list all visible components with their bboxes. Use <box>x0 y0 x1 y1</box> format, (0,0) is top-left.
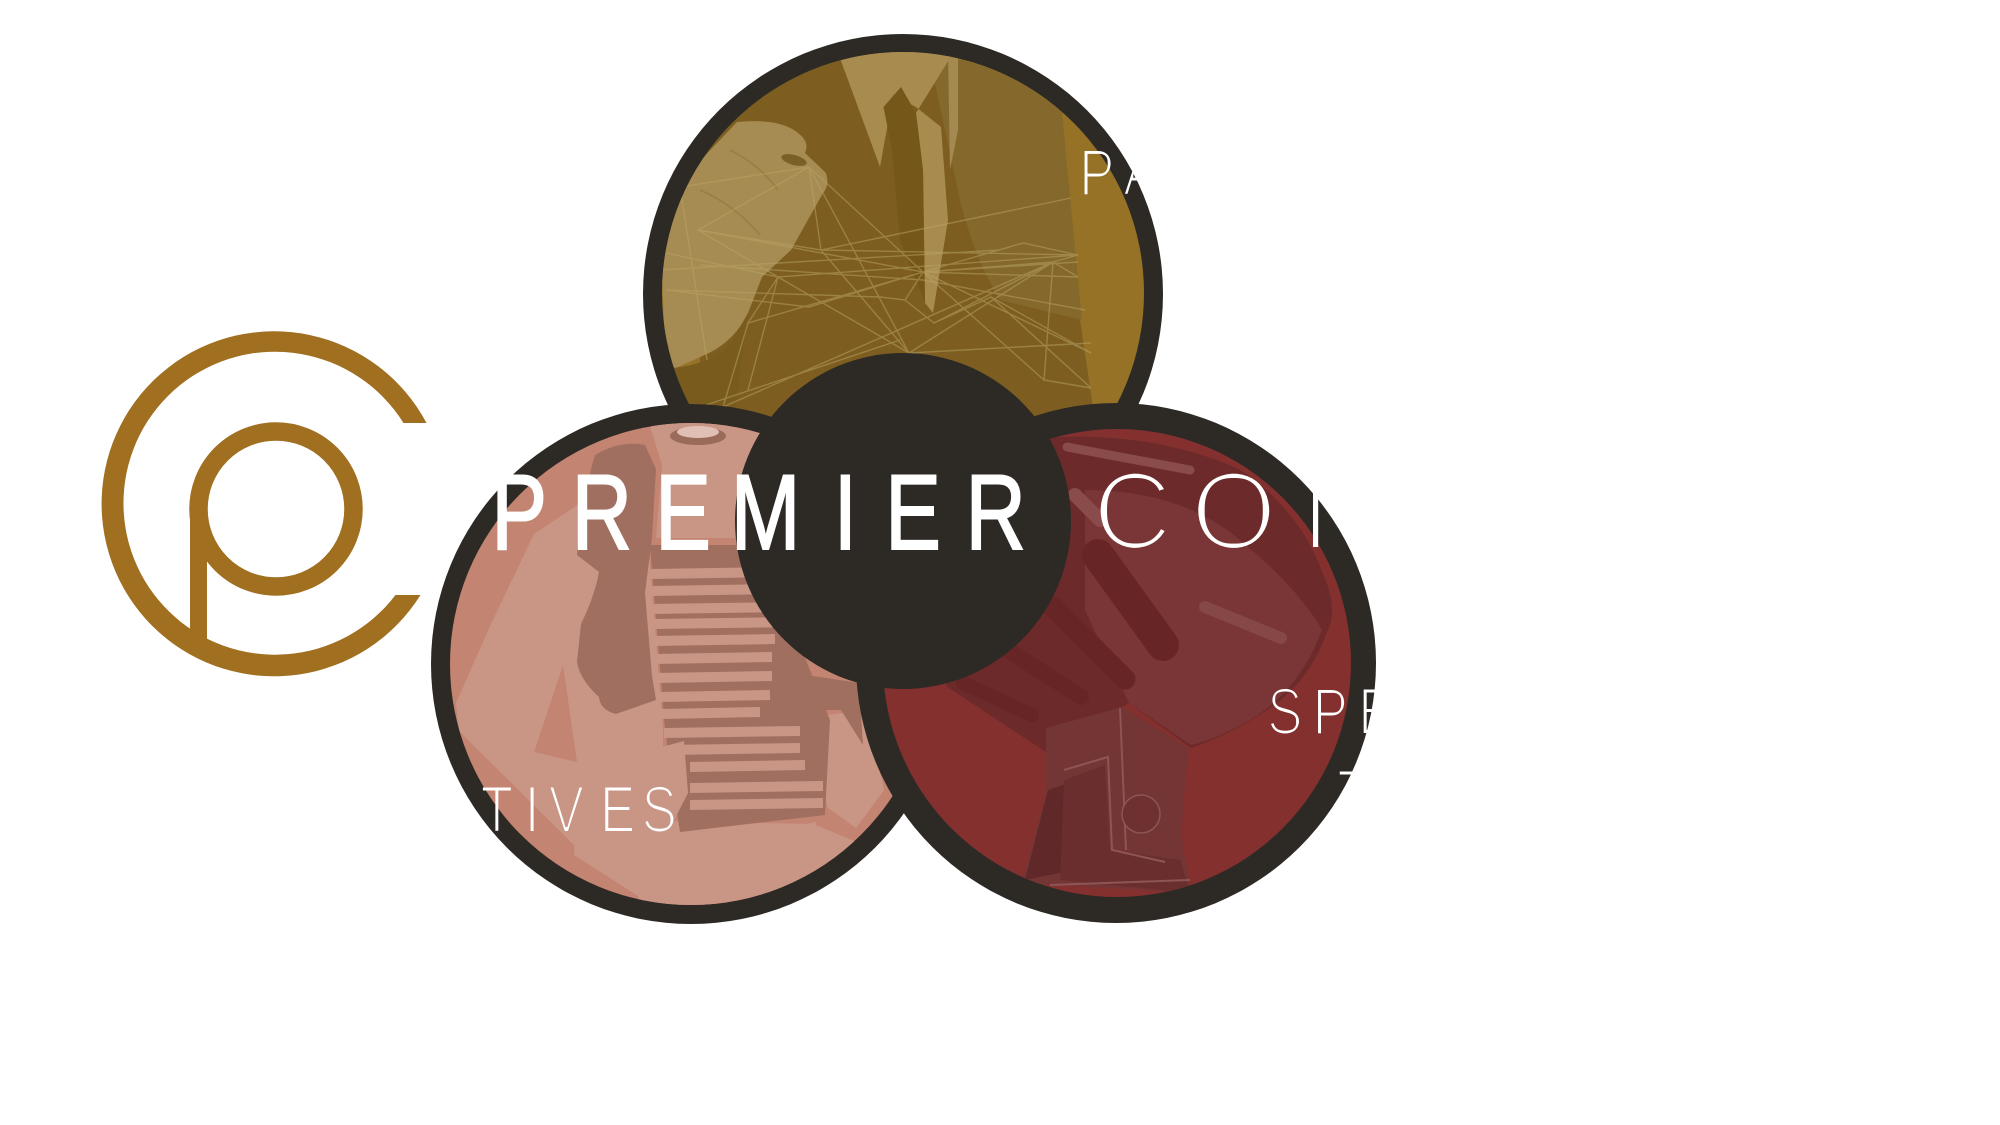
heading: PREMIER: PREMIER <box>491 453 1026 572</box>
panel: left circle, executives photo <box>431 404 904 924</box>
heading: CONSULTING: CONSULTING <box>1093 450 1896 573</box>
panel: center dark circle <box>735 353 1071 689</box>
panel: top circle, partners photo <box>643 34 1163 417</box>
label: PARTNERS: PARTNERS <box>1079 135 1459 209</box>
label: SPEAKERS: SPEAKERS <box>1267 674 1635 748</box>
label: TRAINERS: TRAINERS <box>1338 756 1699 830</box>
icon: CP monogram logo <box>102 331 427 676</box>
panel: right circle, speakers microphone photo <box>856 403 1376 923</box>
label: EXECUTIVES: EXECUTIVES <box>265 772 677 846</box>
